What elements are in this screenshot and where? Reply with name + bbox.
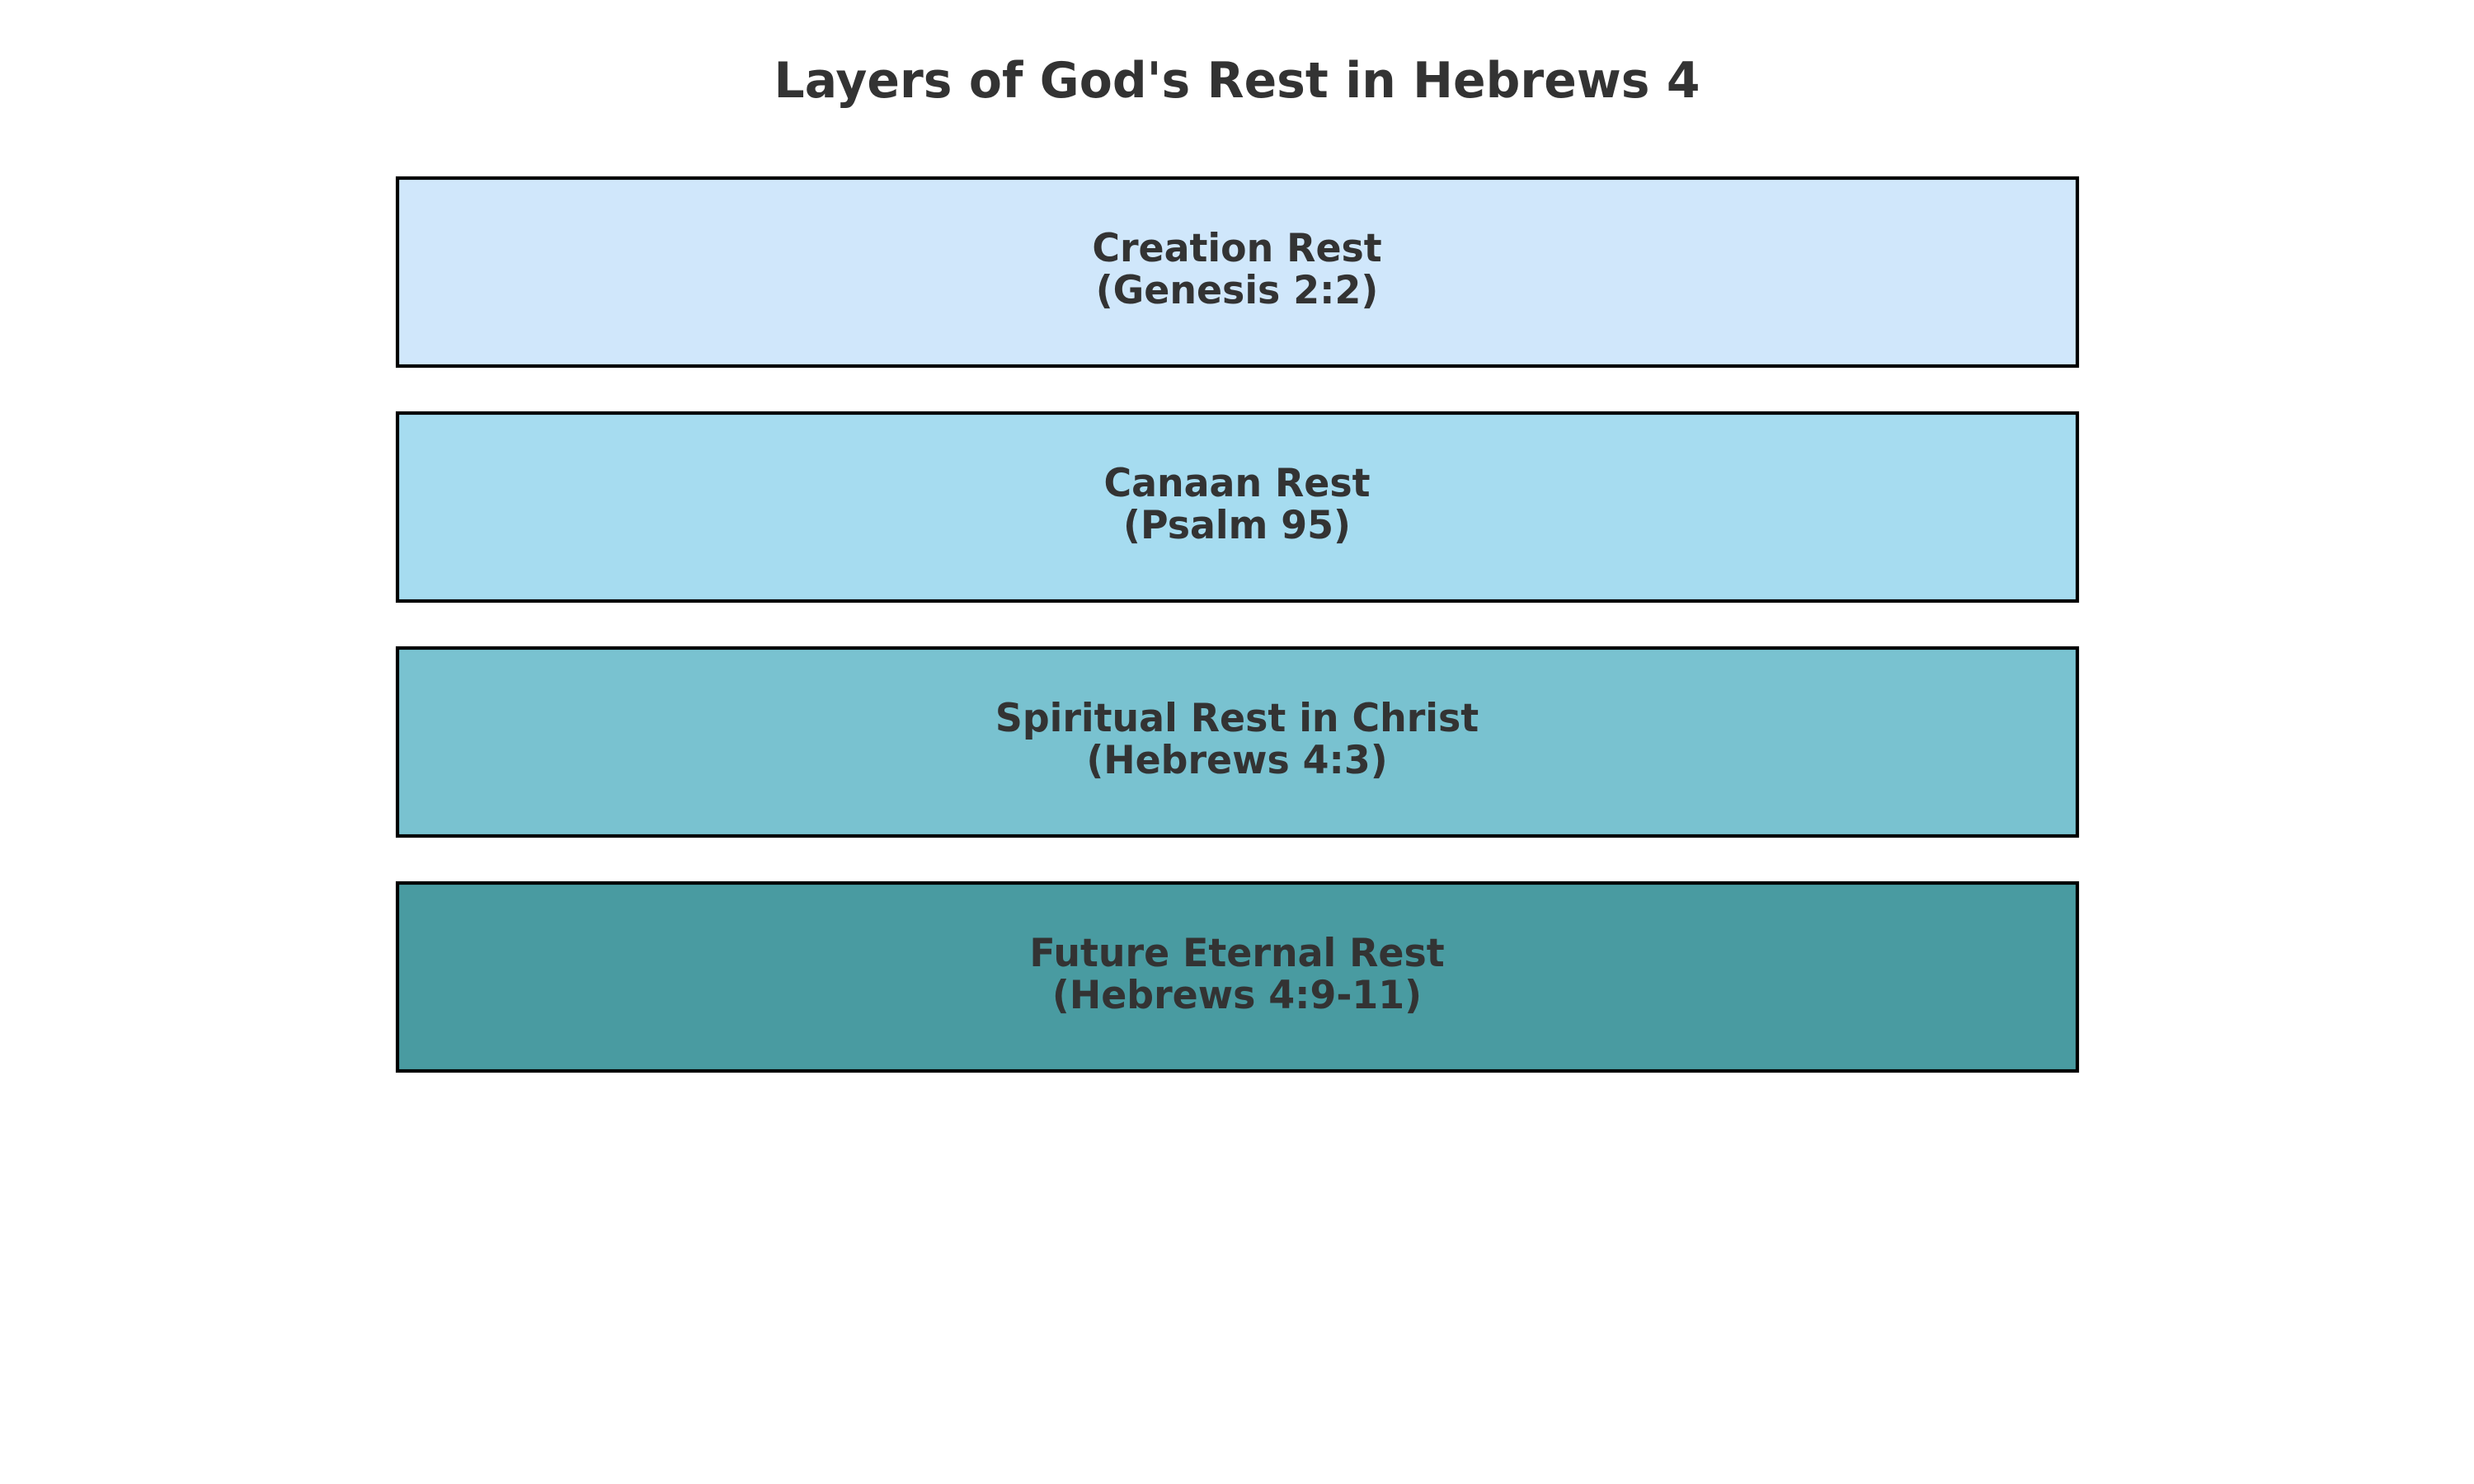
layer: Future Eternal Rest: Future Eternal Rest: [1029, 930, 1445, 975]
layer: Canaan Rest: (Psalm 95): [1123, 502, 1351, 547]
layer: Creation Rest: [397, 178, 2077, 366]
layer: Creation Rest: (Genesis 2:2): [1096, 267, 1378, 312]
layer: Future Eternal Rest: [397, 883, 2077, 1071]
title: Layers of God's Rest in Hebrews 4: [774, 51, 1700, 109]
layer: Spiritual Rest in Christ: [397, 648, 2077, 836]
layer: Canaan Rest: [397, 413, 2077, 601]
layer: Creation Rest: Creation Rest: [1092, 225, 1382, 270]
layer: Spiritual Rest in Christ: Spiritual Rest in Christ: [995, 695, 1479, 740]
layer: Future Eternal Rest: (Hebrews 4:9-11): [1052, 972, 1422, 1017]
layer: Spiritual Rest in Christ: (Hebrews 4:3): [1086, 737, 1388, 782]
layer: Canaan Rest: Canaan Rest: [1103, 460, 1371, 505]
